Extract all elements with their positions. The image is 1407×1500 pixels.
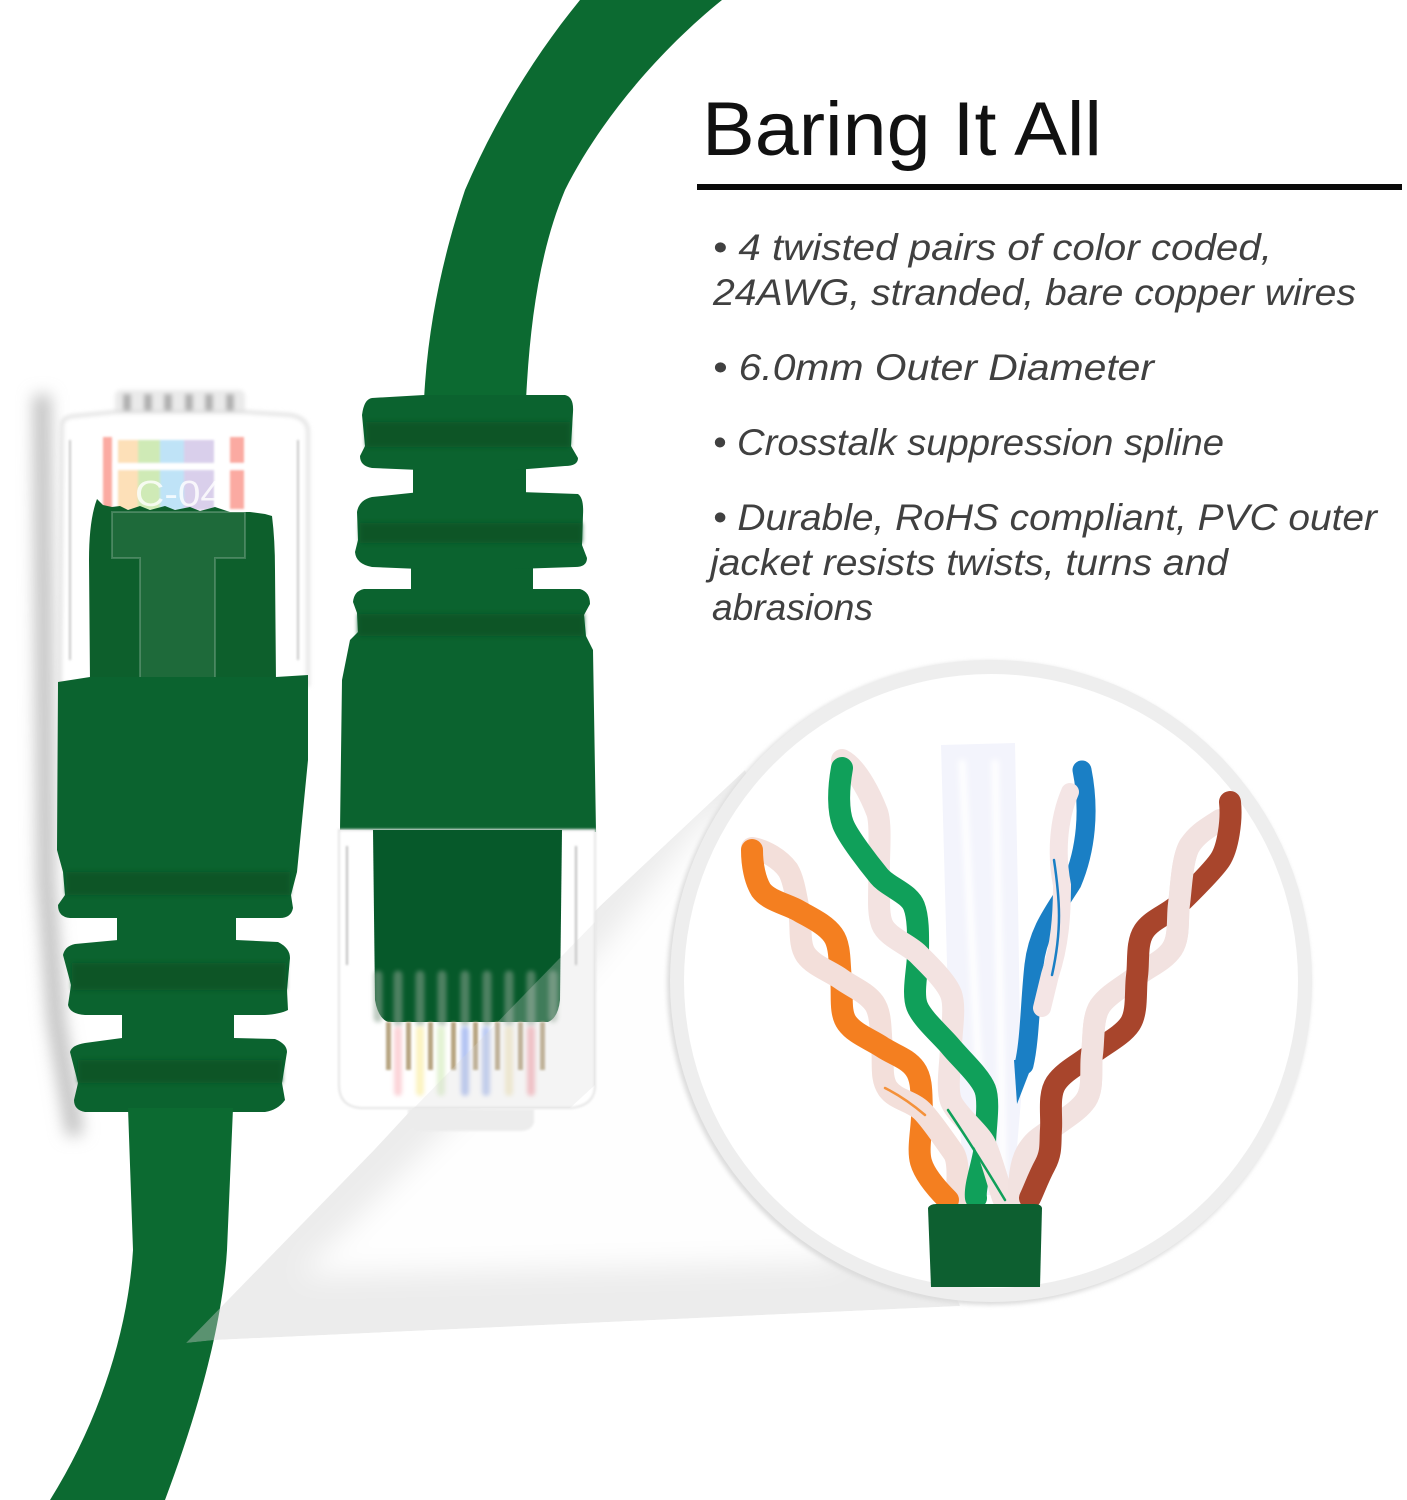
translucent latch [112,512,245,683]
left RJ45 plug [57,390,308,1112]
orange twisted pair [752,848,958,1200]
white strand [842,760,1003,1198]
green strand [839,768,987,1198]
bullet: spline: • Crosstalk suppression spline [713,422,1224,463]
bullet: durable jacket: • Durable, RoHS compliant, PVC outer [713,497,1379,538]
circle ring [670,660,1312,1302]
plug tab [408,1109,534,1131]
orange strand [752,850,948,1200]
circle shadow [667,661,1311,1305]
blue stripe [1052,860,1059,975]
white overlaps [806,955,953,1152]
white overlaps [1086,845,1190,1100]
brown strand [1030,802,1231,1198]
white overlaps [882,924,1003,1198]
plug top tab [115,390,245,420]
bullet: twisted pairs: • 4 twisted pairs of color coded, [713,227,1272,268]
callout cone [186,770,960,1343]
green stripe [948,1110,1005,1200]
magnifier circle [667,660,1312,1305]
coloured wire contacts [103,437,245,510]
title rule [697,184,1402,190]
blue tail [1014,1060,1034,1104]
cone tint over plug [414,922,595,1108]
brown twisted pair [1019,802,1231,1198]
contact fingers [378,975,553,1022]
left edge shadow [42,395,75,1135]
green twisted pair [839,760,1005,1200]
boot shading [66,872,290,1083]
boot rings and body [340,395,596,832]
circle interior [684,674,1298,1288]
plug side slots [347,846,576,965]
coloured wires seen through plug [398,1030,531,1092]
plug side slots [70,440,298,660]
bullet: durable jacket: abrasions [712,587,873,628]
blue twisted pair [1014,770,1086,1104]
upper green cable [424,0,722,400]
gold pins [386,1022,545,1070]
lower green cable [50,1108,233,1500]
green core [373,830,562,1022]
clear plug body [60,412,308,685]
white strand [1019,820,1220,1198]
bullet: outer diameter: • 6.0mm Outer Diameter [713,347,1156,388]
green core [89,499,276,682]
boot body and rings [57,675,308,1112]
bullet: twisted pairs: 24AWG, stranded, bare copper wires [712,272,1356,313]
green cable jacket cross-section [928,1204,1042,1287]
bullet: durable jacket: jacket resists twists, turns and [705,542,1229,583]
white strand [752,848,958,1200]
blue strand [1024,770,1086,1065]
right RJ45 plug [339,395,596,1131]
title: Baring It All [702,87,1102,172]
C-04 label: C-04 [135,473,223,514]
white strand [1042,792,1070,1008]
crosstalk spline [941,743,1021,1195]
boot shading [358,422,584,636]
clear plug body [339,830,595,1108]
orange stripe [885,1088,925,1115]
